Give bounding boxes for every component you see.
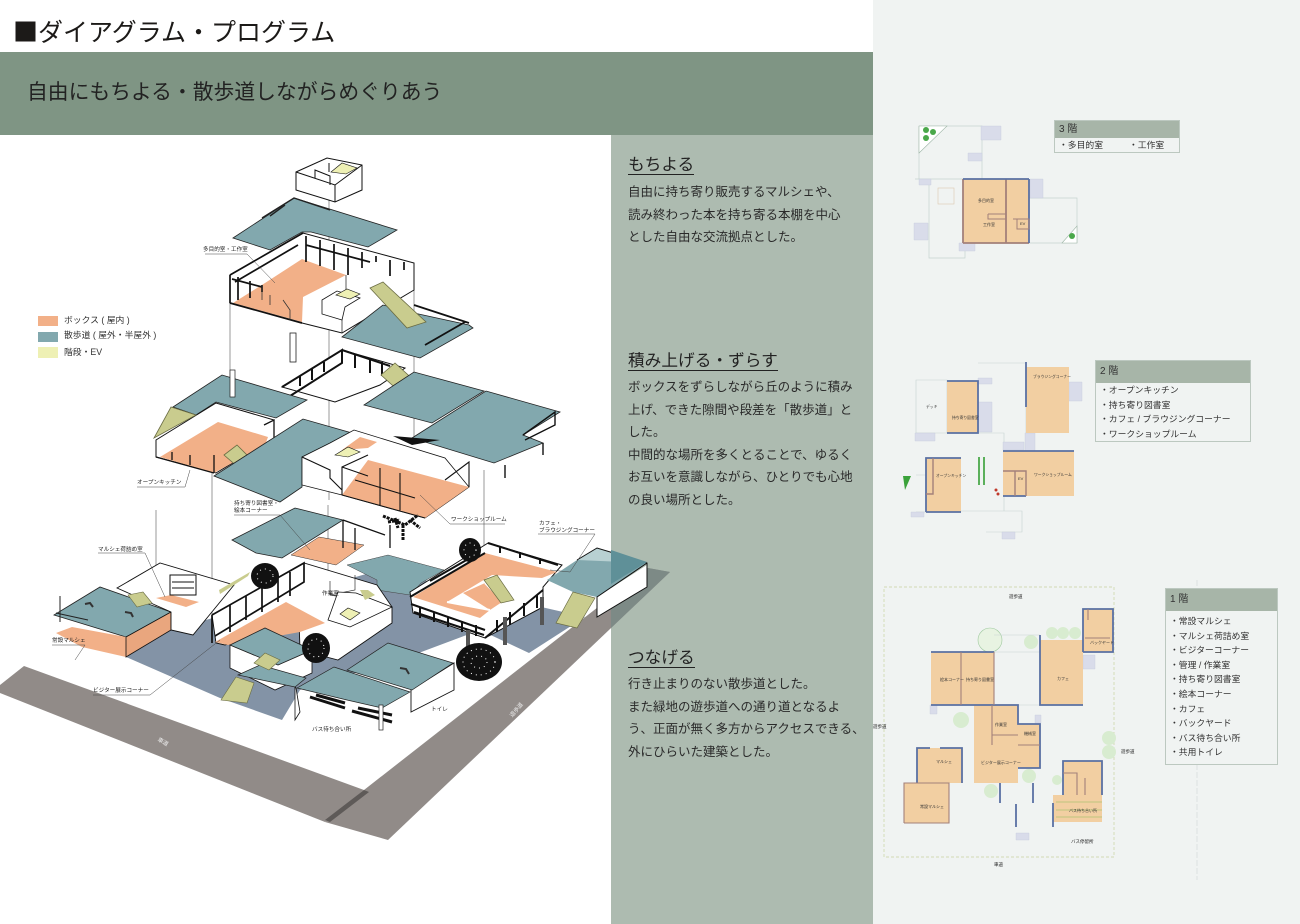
plan: floor 1: 常設マルシェ <box>920 803 944 809</box>
right cafe roof <box>547 548 647 628</box>
plan: floor 1: 持ち寄り図書室 <box>966 676 994 682</box>
stair floor 3 <box>370 282 426 328</box>
diagram labels: 持ち寄り図書室・ <box>234 499 279 507</box>
diagram labels: 遊歩道 <box>508 700 525 719</box>
plan: floor 1: 遊歩道 <box>1121 748 1135 755</box>
heading band: 自由にもちよる・散歩道しながらめぐりあう <box>27 81 442 104</box>
body: mochiyoru: 読み終わった本を持ち寄る本棚を中心 <box>628 208 841 222</box>
cafe building <box>410 543 562 653</box>
legend: floor 1 rooms: 1 階 <box>1170 594 1188 605</box>
diagram labels: ブラウジングコーナー <box>539 526 595 534</box>
marche roof <box>54 587 171 657</box>
diagram labels <box>52 245 595 748</box>
body: stack and shift: 上げ、できた隙間や段差を「散歩道」と <box>628 403 852 417</box>
floor 3 roof <box>233 198 397 250</box>
legend: floor 2 rooms: ・持ち寄り図書室 <box>1100 400 1170 410</box>
floor 3 balcony <box>342 305 473 358</box>
body: stack and shift: お互いを意識しながら、ひとりでも心地 <box>628 470 853 484</box>
legend <box>38 314 156 358</box>
body: mochiyoru <box>628 185 841 244</box>
plan: floor 2 <box>903 362 1082 539</box>
plan: floor 1: 車道 <box>994 861 1003 868</box>
legend: floor 3 rooms: 3 階 <box>1059 124 1077 135</box>
legend: floor 2 rooms: ・カフェ / ブラウジングコーナー <box>1100 414 1230 424</box>
ground plane <box>126 570 585 720</box>
floor 2 right terrace <box>364 372 560 478</box>
plan: floor 1 <box>873 580 1197 880</box>
legend: floor 1 rooms: ・バックヤード <box>1170 718 1232 728</box>
legend: floor 2 rooms <box>1095 360 1251 442</box>
plan: floor 2: オープンキッチン <box>936 473 966 478</box>
body: mochiyoru: とした自由な交流拠点とした。 <box>628 230 803 244</box>
legend: floor 1 rooms: ・管理 / 作業室 <box>1170 660 1230 670</box>
plan: floor 1: バックヤード <box>1090 639 1114 645</box>
floor 3 stair box <box>296 158 362 202</box>
plan: floor 2: EV <box>1018 476 1024 481</box>
body: connect <box>628 677 865 759</box>
floor 2 back frame <box>282 350 405 402</box>
plan: floor 2: 持ち寄り図書室 <box>952 415 979 420</box>
body: connect: 行き止まりのない散歩道とした。 <box>628 677 816 691</box>
trees <box>251 515 502 681</box>
diagram labels: ビジター展示コーナー <box>93 686 149 694</box>
diagram labels: 常設マルシェ <box>52 636 86 644</box>
plan: floor 1: 絵本コーナー <box>940 676 964 682</box>
legend: ボックス ( 屋内 ) <box>64 314 130 325</box>
body: stack and shift <box>628 380 853 507</box>
plan: floor 2: ワークショップルーム <box>1034 472 1072 477</box>
legend: floor 2 rooms: 2 階 <box>1100 366 1118 377</box>
legend: floor 1 rooms <box>1165 588 1278 765</box>
stair floor 2 back <box>381 363 428 403</box>
diagram labels: バス待ち合い所 <box>312 725 352 733</box>
marche packing room <box>117 563 234 635</box>
body: stack and shift: した。 <box>628 425 666 439</box>
plan: floor 1: 遊歩道 <box>1009 593 1023 600</box>
column floor 2 <box>230 370 235 397</box>
bus shelter <box>221 653 410 730</box>
plan: floor 3 <box>914 126 1077 258</box>
plan: floor 2: ブラウジングコーナー <box>1033 374 1071 379</box>
diagram labels: マルシェ荷詰め室 <box>98 545 143 553</box>
legend: floor 1 rooms: ・マルシェ荷詰め室 <box>1170 631 1249 641</box>
heading band <box>0 52 873 135</box>
legend: floor 3 rooms: ・工作室 <box>1129 140 1164 150</box>
column <box>290 333 296 362</box>
legend: floor 3 rooms: ・多目的室 <box>1059 140 1103 150</box>
diagram labels: ワークショップルーム <box>451 516 507 523</box>
legend: floor 2 rooms: ・オープンキッチン <box>1100 385 1179 395</box>
floor plans <box>873 126 1198 880</box>
central terrace <box>347 555 444 595</box>
floor 2 center terrace <box>214 419 352 502</box>
plan: floor 3: 工作室 <box>983 221 995 227</box>
panel: text column background <box>611 135 873 924</box>
ground floor visitor corner <box>212 563 392 660</box>
legend: floor 1 rooms: ・持ち寄り図書室 <box>1170 674 1240 684</box>
title: ■ダイアグラム・プログラム <box>13 13 335 49</box>
diagram labels: トイレ <box>431 707 448 713</box>
diagram labels: 車道 <box>156 735 170 748</box>
body: stack and shift: 中間的な場所を多くとることで、ゆるく <box>628 448 852 462</box>
body: stack and shift: の良い場所とした。 <box>628 493 741 507</box>
body: mochiyoru: 自由に持ち寄り販売するマルシェや、 <box>628 185 840 199</box>
plan: floor 1: 作業室 <box>995 721 1007 727</box>
plan: floor 1: バス待ち合い所 <box>1069 807 1097 813</box>
heading: stack and shift: 積み上げる・ずらす <box>628 351 778 370</box>
diagram labels: オープンキッチン <box>137 479 182 486</box>
library upper roof and floor <box>219 508 390 594</box>
isometric exploded diagram <box>0 158 670 840</box>
plan: floor 1: 機械室 <box>1024 730 1036 736</box>
plan: floor 3: 多目的室 <box>978 197 994 203</box>
floor 3 box <box>230 233 414 333</box>
plan: floor 1: マルシェ <box>936 759 952 764</box>
legend: floor 1 rooms: ・共用トイレ <box>1170 747 1223 757</box>
plan: floor 2: デッキ <box>926 404 938 409</box>
projection lines <box>156 190 484 620</box>
legend: floor 1 rooms: ・バス待ち合い所 <box>1170 733 1240 743</box>
diagram labels: カフェ・ <box>539 520 561 527</box>
floor 2 left terrace <box>173 375 307 418</box>
legend: floor 1 rooms: ・絵本コーナー <box>1170 689 1232 699</box>
diagram labels: 作業室 <box>322 589 339 597</box>
toilet block <box>347 643 454 712</box>
plan: floor 1: ビジター展示コーナー <box>981 759 1021 765</box>
body: connect: また緑地の遊歩道への通り道となるよ <box>628 700 840 714</box>
floor 2 open kitchen <box>156 403 274 473</box>
legend: 散歩道 ( 屋外・半屋外 ) <box>64 329 156 340</box>
legend: 階段・EV <box>64 346 102 357</box>
legend: floor 3 rooms <box>1054 120 1180 153</box>
plan: floor 1: カフェ <box>1057 676 1069 681</box>
panel: right floor plan background <box>873 0 1300 924</box>
stairs floor 2 left <box>154 407 265 480</box>
legend: floor 1 rooms: ・カフェ <box>1170 704 1205 714</box>
plan: floor 1: バス停留所 <box>1071 838 1094 845</box>
ground floor visitor roof <box>230 628 312 690</box>
plan: floor 3: EV <box>1020 221 1026 226</box>
body: connect: 外にひらいた建築とした。 <box>628 745 778 759</box>
diagram labels: 多目的室・工作室 <box>203 245 248 253</box>
diagram labels: 絵本コーナー <box>234 506 268 514</box>
legend: floor 1 rooms: ・ビジターコーナー <box>1170 645 1249 655</box>
heading: connect: つなげる <box>628 648 695 667</box>
plan: floor 1: 遊歩道 <box>873 723 887 730</box>
text column content <box>628 155 865 759</box>
legend: floor 1 rooms: ・常設マルシェ <box>1170 616 1232 626</box>
legend: floor 2 rooms: ・ワークショップルーム <box>1100 429 1197 439</box>
heading: mochiyoru: もちよる <box>628 155 694 174</box>
floor 2 workshop box <box>302 430 469 518</box>
body: connect: う、正面が無く多方からアクセスできる、 <box>628 722 865 736</box>
road and footpath <box>0 568 670 840</box>
body: stack and shift: ボックスをずらしながら丘のように積み <box>628 380 853 394</box>
